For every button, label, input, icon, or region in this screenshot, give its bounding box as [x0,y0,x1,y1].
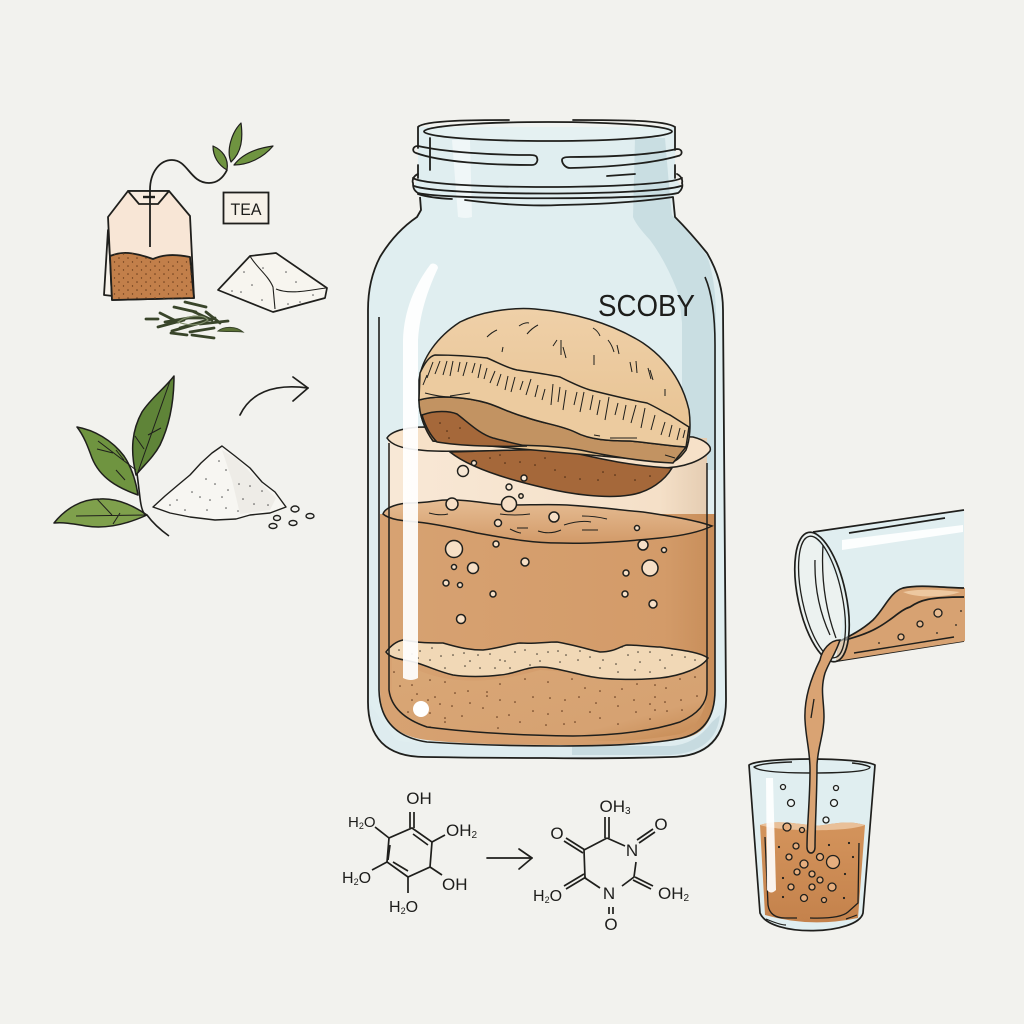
bubbles in liquid [443,494,666,624]
right molecule: OH [658,884,684,903]
surface ripple dashes [429,513,607,533]
dome crease marks [425,323,675,458]
icon: sprig on tea string [213,123,273,170]
glass body [749,759,875,931]
left molecule: H [389,899,401,916]
left molecule: 2 [354,877,359,887]
inner walls of jar [379,277,715,746]
crust speckles [440,423,650,480]
bottle liquid [836,586,965,661]
liquid surface [383,500,712,543]
illustration: tea bag [104,160,227,300]
right molecule: N [626,841,638,860]
bubbles under SCOBY [458,460,527,490]
left molecule: O [359,870,371,887]
string and leaves [150,160,227,247]
shaded right side [633,138,716,470]
glass liquid [760,822,865,922]
band speckles [399,647,695,672]
right molecule: OH [599,797,625,816]
right molecule: O [654,815,668,834]
diagram: chemical structures [342,789,690,934]
pale tea [388,438,707,520]
left molecule: H [348,814,359,831]
light wavy band [419,355,689,447]
right molecule: 3 [625,806,631,817]
illustration: glass jar [367,120,726,758]
right molecule: O [604,915,618,934]
left molecule: 2 [401,906,406,916]
disc on liquid [387,427,710,468]
illustration: tilted bottle pouring [785,510,965,667]
brown crust [422,412,527,446]
left molecule: O [364,814,376,831]
icon: large tea leaves [54,376,174,536]
reaction arrow [487,849,532,869]
right molecule: H [533,888,545,905]
white highlights [403,264,438,680]
left molecule: OH [406,789,432,808]
icon: sugar pile with grains [153,446,314,528]
left molecule: 2 [472,830,478,841]
neck and rim [413,120,682,205]
sediment layer [392,655,707,741]
middle tan layer [419,397,686,463]
sediment speckles [394,672,697,728]
label: TEA tag: TEA [230,200,262,219]
glass rim [754,762,870,773]
icon: loose tea leaves [146,302,243,338]
right molecule: O [550,888,562,905]
right molecule: 2 [545,895,550,905]
left molecule: OH [446,821,472,840]
bottle body [813,510,964,661]
left molecule: OH [442,875,468,894]
bottle bubbles [898,609,942,640]
left molecule: 2 [359,821,364,831]
illustration: drinking glass with bubbles [749,759,875,931]
bottle rim [785,527,859,667]
left molecule: O [406,899,418,916]
glass inner lines [765,837,859,918]
right molecule [533,797,690,934]
dome top [419,309,690,462]
jar outline [368,197,726,758]
bottle highlights [842,525,963,550]
SCOBY disc [387,309,710,496]
illustration: tea stream [805,640,840,853]
pale sediment band [386,640,708,679]
left molecule [342,789,478,916]
glass highlight [766,778,776,892]
icon: sugar cube [218,253,327,312]
band hatch lines [423,361,685,440]
left molecule: H [342,870,354,887]
label: TEA tag [224,192,268,224]
jar body glass [367,127,726,758]
liquid [380,514,715,745]
right molecule: N [603,884,615,903]
right molecule: O [550,824,564,843]
submerged brown underside [450,450,672,496]
label: SCOBY: SCOBY [598,288,695,323]
arrow: ingredients into jar [240,377,308,415]
bubbles [783,823,840,902]
right molecule: 2 [684,893,690,904]
